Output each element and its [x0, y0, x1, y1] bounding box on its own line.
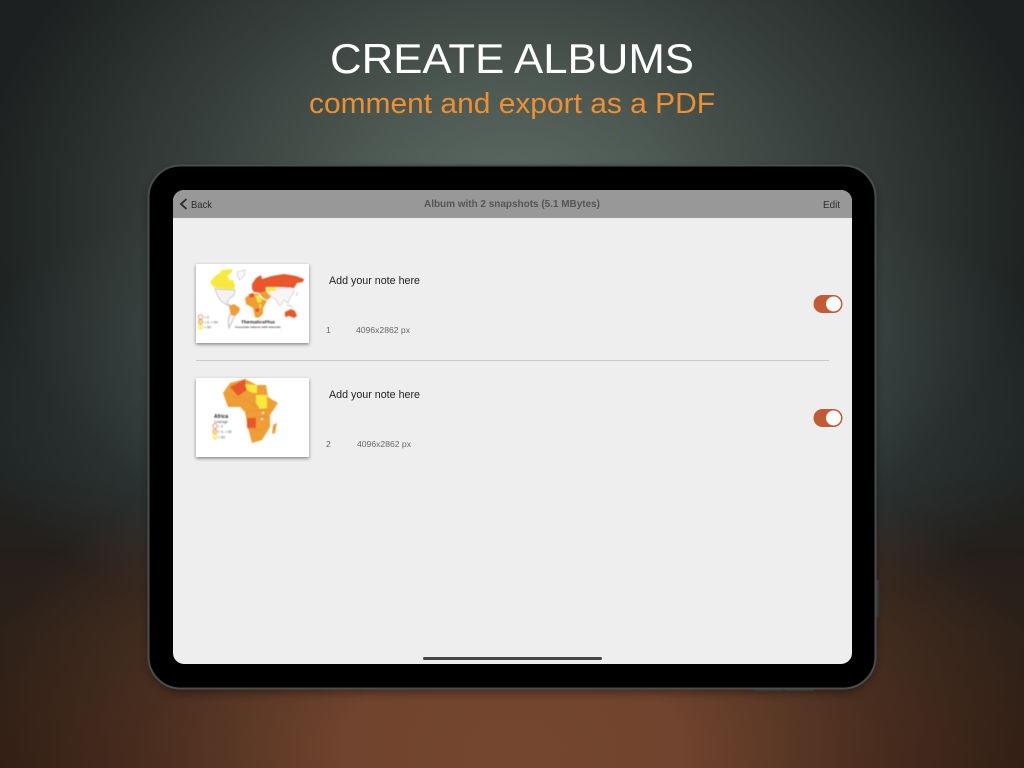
tablet device: [148, 166, 879, 692]
icon: back chevron: [181, 199, 186, 209]
row: snapshot 1: [196, 264, 842, 343]
thumbnail: Africa map: > 0, < 50: [218, 430, 232, 434]
note: Add your note here: [329, 389, 420, 401]
internal borders: [232, 396, 268, 430]
album title: Album with 2 snapshots (5.1 MBytes): [424, 198, 600, 210]
Central Asia: [265, 287, 276, 291]
title: CREATE ALBUMS: [330, 35, 694, 82]
map title: ThematicsPlus: [241, 320, 275, 326]
thumbnail: world map: Associate nations with intervals: [235, 325, 281, 329]
Egypt: [257, 385, 266, 394]
Canada: [210, 269, 235, 290]
dimensions: 4096x2862 px: [356, 325, 411, 335]
toggle: [814, 409, 842, 427]
Asia outline: [269, 287, 294, 306]
thumbnail: world map: [196, 264, 309, 343]
thumbnail: world map: > 50: [204, 326, 211, 330]
Libya: [245, 384, 257, 393]
map legend: Africa: [214, 414, 228, 420]
Algeria: [230, 379, 247, 396]
divider: [196, 360, 829, 361]
thumbnail: world map: > 0, < 50: [204, 320, 218, 324]
subtitle: comment and export as a PDF: [309, 88, 715, 120]
side and bottom buttons: [754, 580, 879, 691]
thumbnail: Africa map: Coverage: [214, 420, 228, 424]
Madagascar: [272, 423, 277, 434]
dimensions: 4096x2862 px: [357, 439, 412, 449]
Greenland and Americas outline regions: [237, 270, 245, 280]
Brazil and South America: [229, 304, 240, 316]
legend: [198, 315, 203, 319]
Russia and Europe: [252, 274, 304, 293]
index: 1: [326, 325, 331, 335]
Africa: [245, 294, 267, 318]
navigation bar: [173, 190, 852, 218]
thumbnail: world map: = 0: [204, 316, 209, 320]
small white gaps: [262, 412, 264, 414]
row: snapshot 2: [196, 378, 842, 457]
Australia: [285, 309, 297, 318]
toggle: [814, 295, 842, 313]
thumbnail: Africa map: [196, 378, 309, 457]
thumbnail: Africa map: > 50: [218, 436, 225, 440]
screen: [173, 190, 852, 664]
thumbnail: Africa map: = 0: [218, 424, 223, 428]
edit label: Edit: [823, 199, 840, 211]
note: Add your note here: [329, 275, 420, 287]
back label: Back: [191, 199, 213, 211]
tablet shadow: [150, 170, 874, 692]
Middle East: [259, 291, 271, 300]
home indicator: [423, 657, 602, 660]
tablet body: [148, 166, 876, 688]
Sudan: [256, 395, 267, 409]
Angola: [247, 418, 256, 428]
index: 2: [326, 439, 331, 449]
Africa mainland: [223, 379, 278, 443]
